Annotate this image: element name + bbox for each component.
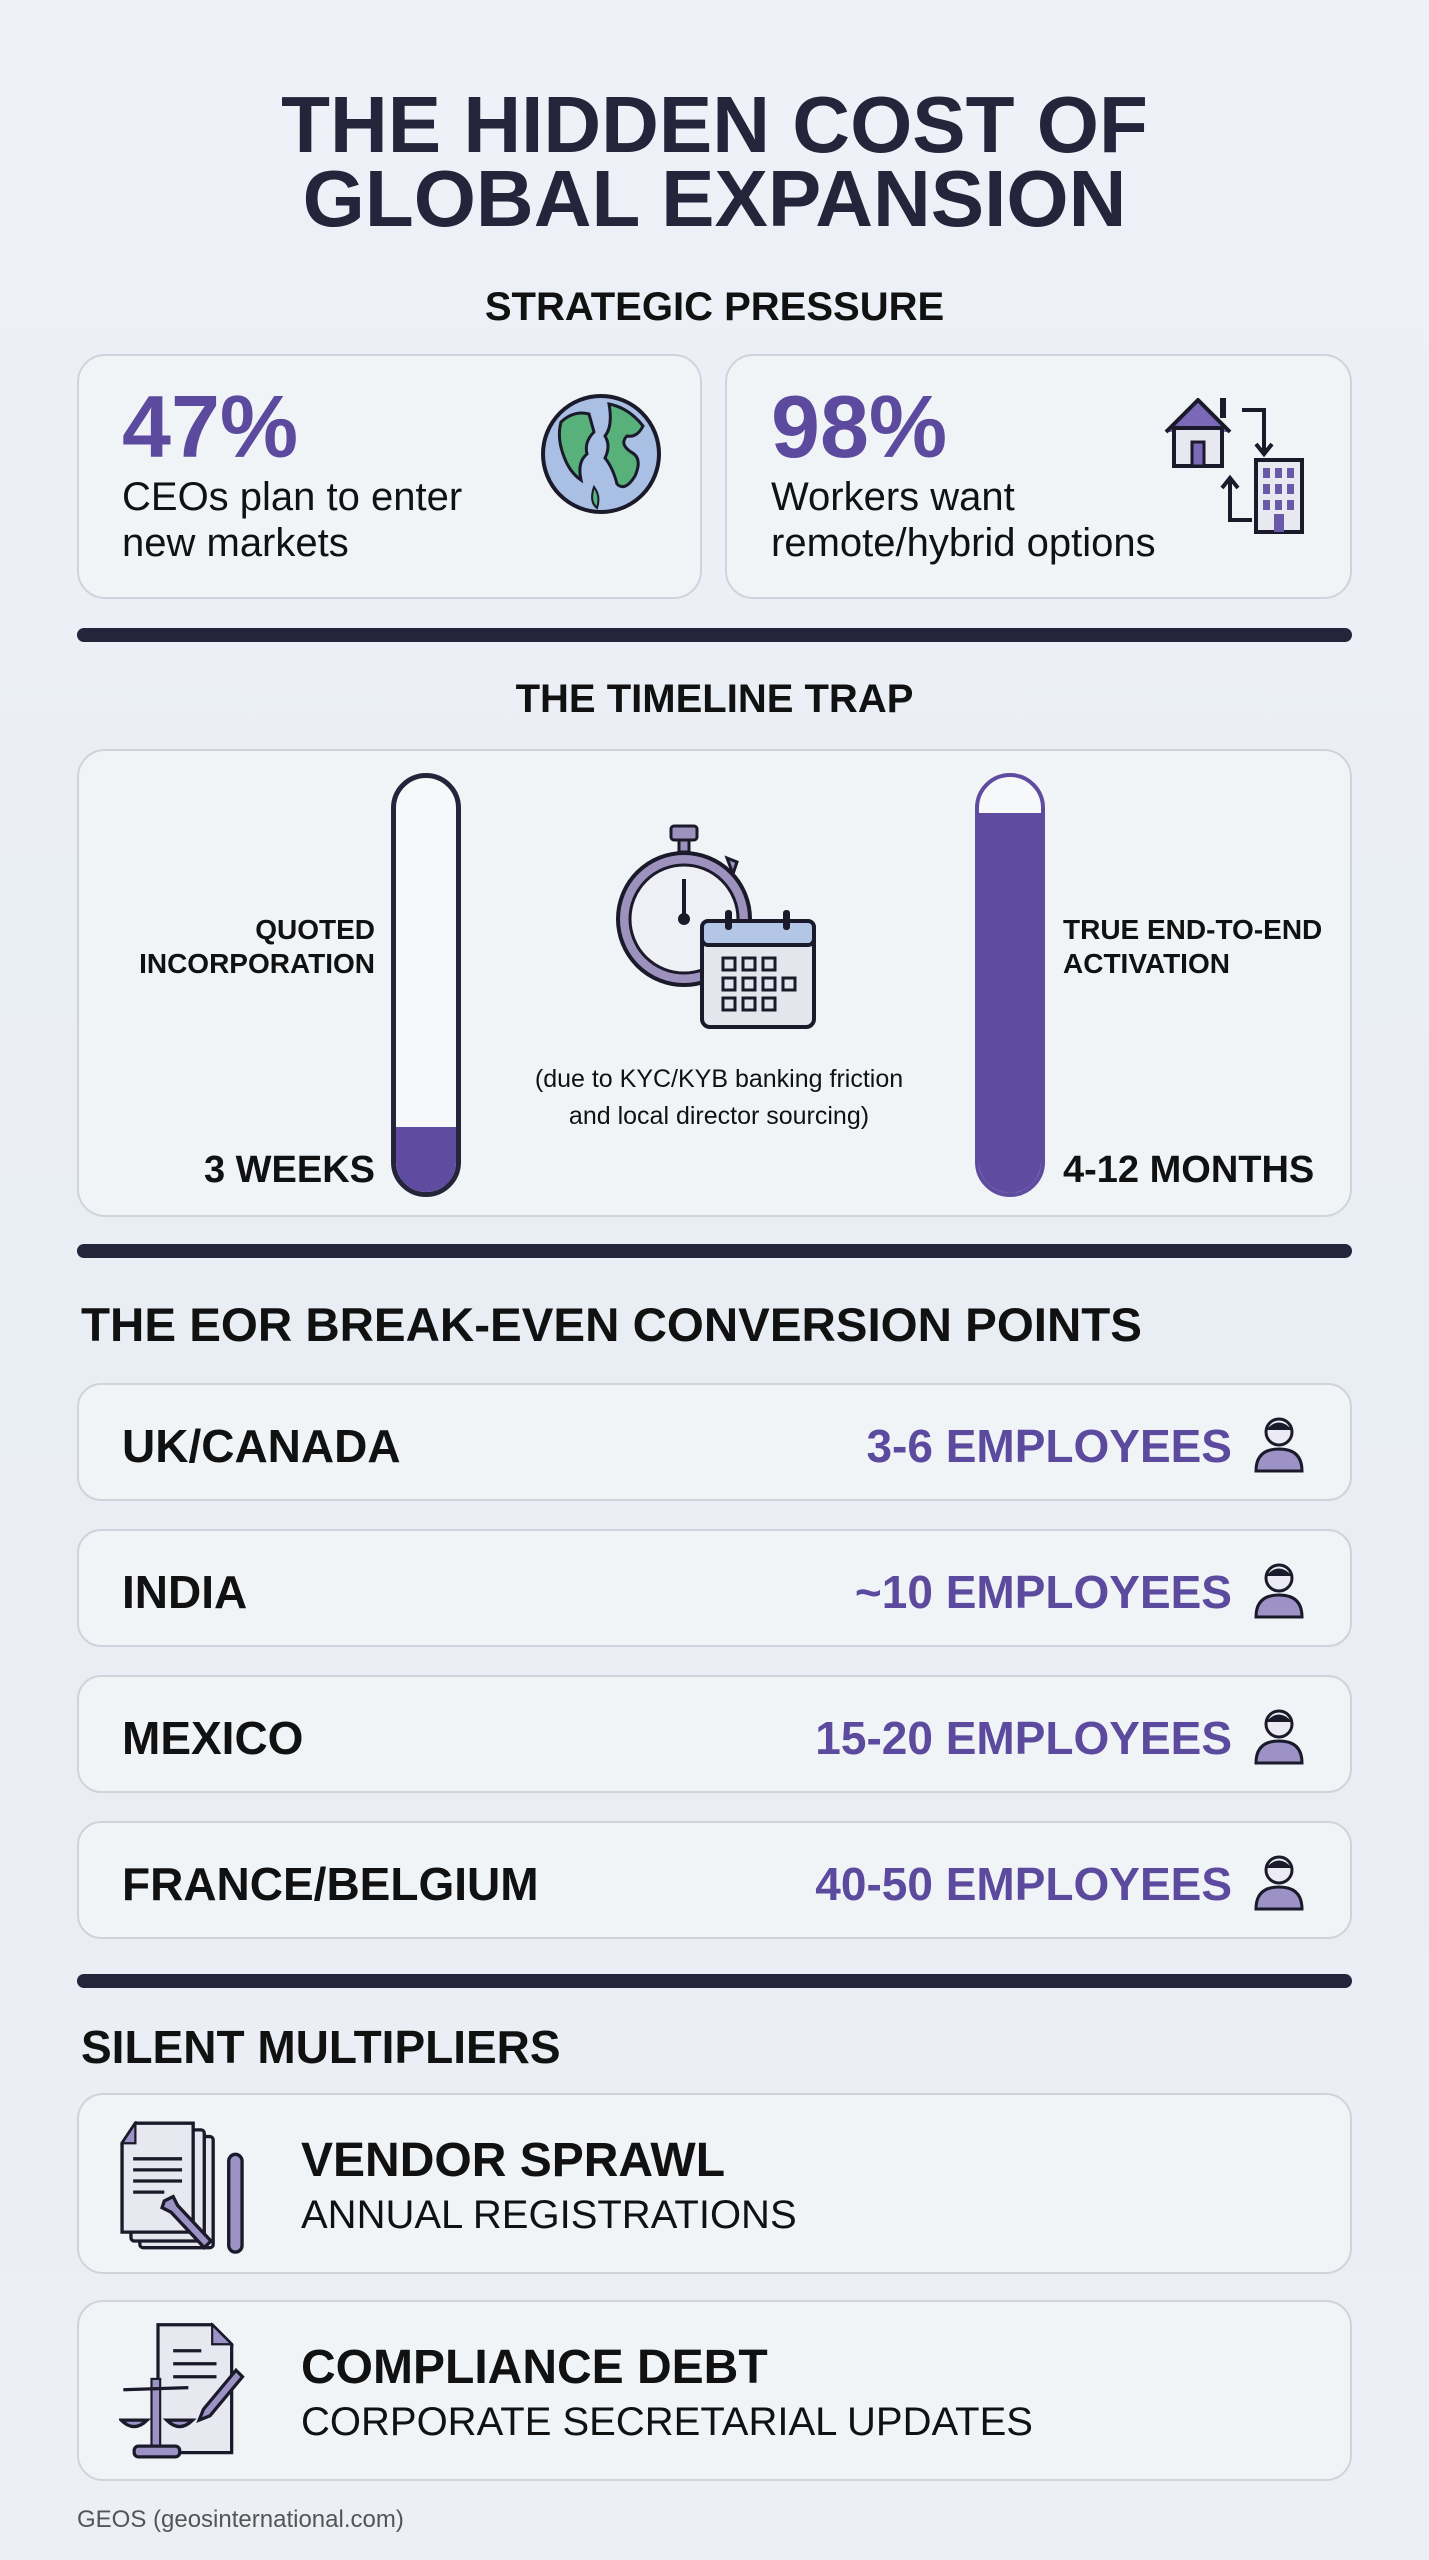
row: Mexico: 15-20 EMPLOYEES — [815, 1712, 1232, 1764]
title: THE HIDDEN COST OF — [281, 80, 1148, 169]
heading: silent multipliers: SILENT MULTIPLIERS — [81, 2021, 561, 2073]
title: vendor sprawl: VENDOR SPRAWL — [301, 2134, 725, 2187]
card: vendor sprawl — [77, 2093, 1352, 2274]
title: compliance debt: COMPLIANCE DEBT — [301, 2341, 768, 2394]
row: India — [77, 1529, 1352, 1647]
label: true end-to-end activation — [1063, 914, 1322, 979]
panel: 47% CEOs — [77, 354, 702, 599]
icon: home to office — [1164, 398, 1304, 534]
row: India: ~10 EMPLOYEES — [855, 1566, 1232, 1618]
subtitle: corporate secretarial updates: CORPORATE SECRETARIAL UPDATES — [301, 2400, 1033, 2444]
stat 47%: 47% — [122, 377, 298, 476]
label: quoted incorporation — [139, 914, 375, 979]
title: GLOBAL EXPANSION — [303, 154, 1126, 243]
row: France/Belgium — [77, 1821, 1352, 1939]
label: 3 weeks: 3 WEEKS — [204, 1149, 375, 1191]
text: CEOs — [122, 475, 462, 565]
heading: strategic pressure: STRATEGIC PRESSURE — [485, 285, 944, 329]
row: France/Belgium: 40-50 EMPLOYEES — [815, 1858, 1232, 1910]
row: India: INDIA — [122, 1566, 247, 1618]
row: Mexico: MEXICO — [122, 1712, 303, 1764]
caption: (due to KYC/KYB banking friction — [535, 1065, 903, 1093]
stat 98%: 98% — [771, 377, 947, 476]
subtitle: annual registrations: ANNUAL REGISTRATIONS — [301, 2193, 797, 2237]
text: workers: Workers want — [771, 475, 1015, 519]
icon: documents and wrench — [120, 2121, 244, 2254]
caption — [535, 1065, 903, 1130]
card: compliance debt — [77, 2300, 1352, 2481]
text: CEOs: CEOs plan to enter — [122, 475, 462, 519]
text: CEOs: new markets — [122, 521, 349, 565]
label: quoted incorporation: QUOTED — [255, 914, 375, 945]
label: quoted incorporation: INCORPORATION — [139, 948, 375, 979]
icon: scales and document — [119, 2322, 245, 2458]
row: UK/Canada: 3-6 EMPLOYEES — [866, 1420, 1232, 1472]
icon: globe — [541, 394, 661, 514]
footer: GEOS (geosinternational.com) — [77, 2506, 404, 2533]
icon: stopwatch and calendar — [616, 824, 816, 1029]
label: true end-to-end activation: ACTIVATION — [1063, 948, 1230, 979]
panel: 98% workers — [725, 354, 1352, 599]
row: UK/Canada — [77, 1383, 1352, 1501]
row: UK/Canada: UK/CANADA — [122, 1420, 401, 1472]
row: France/Belgium: FRANCE/BELGIUM — [122, 1858, 539, 1910]
heading: EOR break-even: THE EOR BREAK-EVEN CONVERSION POINTS — [81, 1299, 1142, 1352]
heading: timeline trap: THE TIMELINE TRAP — [516, 677, 913, 721]
label: 4-12 months: 4-12 MONTHS — [1063, 1149, 1314, 1191]
panel: timeline — [77, 749, 1352, 1217]
right tube: 4-12 months — [975, 773, 1045, 1197]
title — [281, 80, 1148, 243]
text: workers — [771, 475, 1156, 565]
text: workers: remote/hybrid options — [771, 521, 1156, 565]
caption: and local director sourcing) — [569, 1102, 869, 1130]
label: true end-to-end activation: TRUE END-TO-END — [1063, 914, 1322, 945]
left tube: 3 weeks — [391, 773, 461, 1197]
row: Mexico — [77, 1675, 1352, 1793]
